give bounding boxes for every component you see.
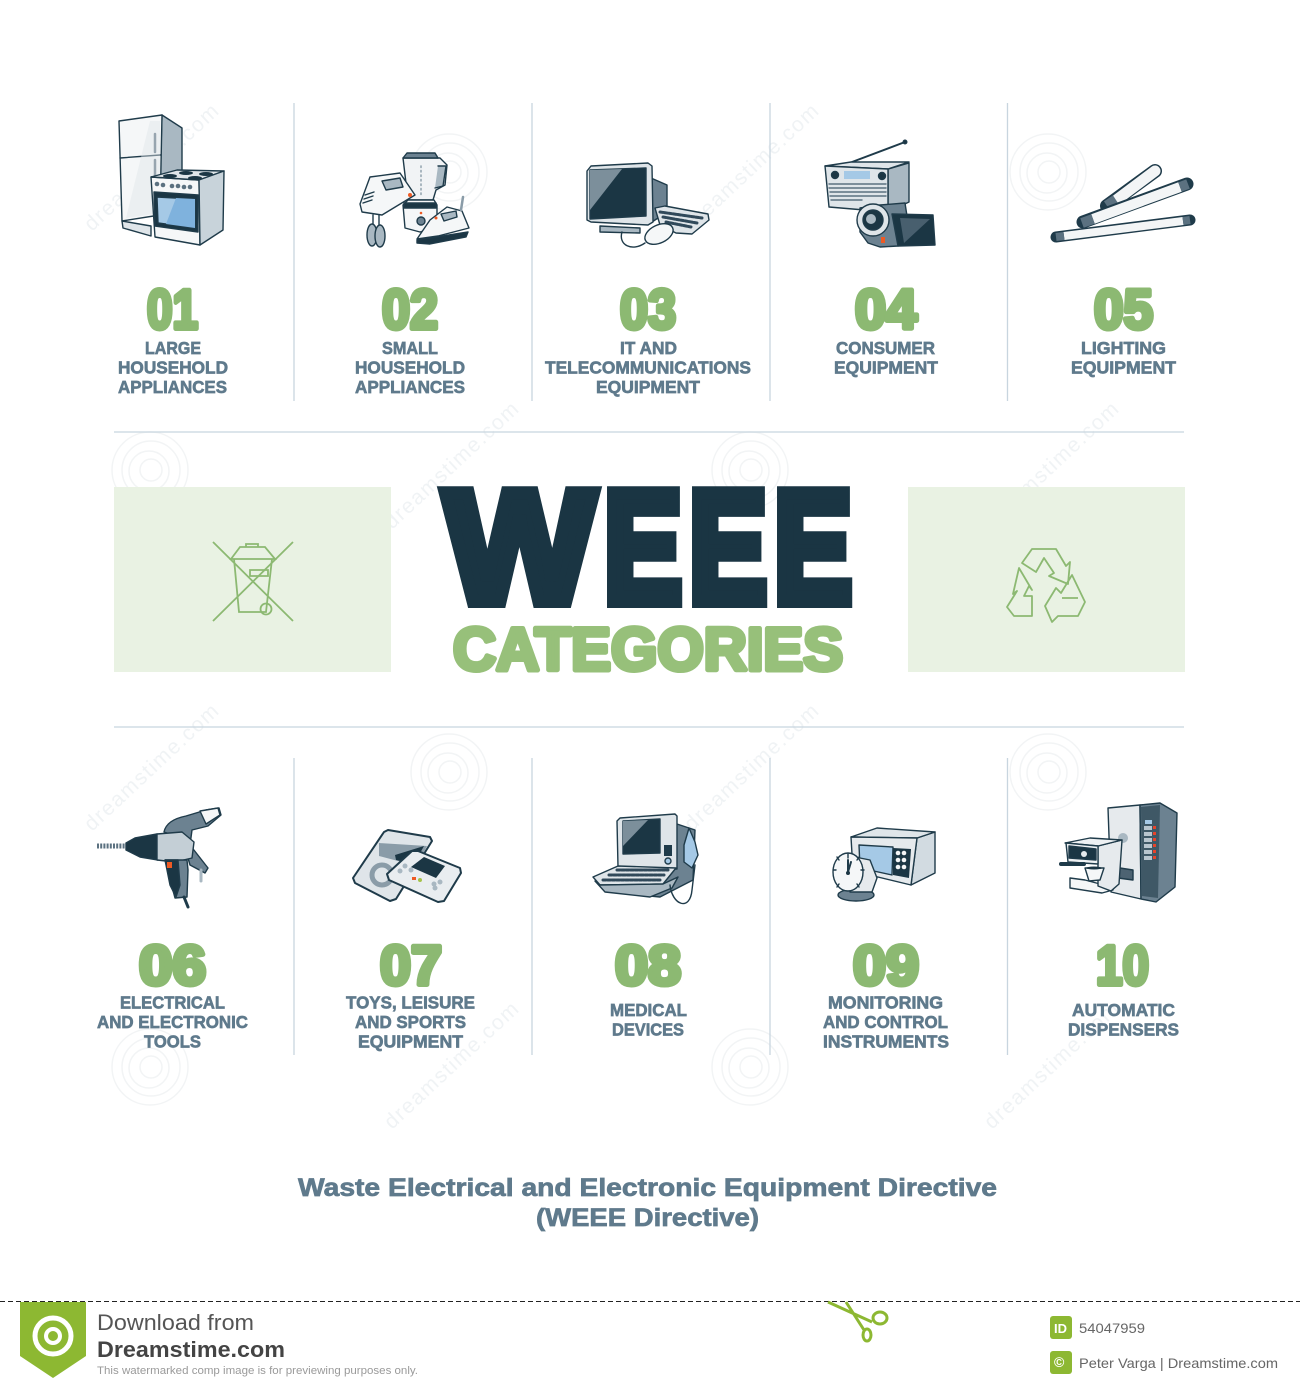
label 08: DEVICES <box>612 1020 684 1040</box>
number 04: 04 <box>855 278 917 340</box>
category 02: small household appliances <box>355 153 469 397</box>
label 07: AND SPORTS <box>355 1012 466 1032</box>
subtitle: CATEGORIES: CATEGORIES <box>453 616 843 683</box>
text: Dreamstime.com: Dreamstime.com <box>97 1337 285 1362</box>
number 07: 07 <box>380 934 442 996</box>
icon: recycling arrows <box>1007 549 1085 622</box>
category 01: large household appliances <box>118 115 228 397</box>
label 09: AND CONTROL <box>823 1012 948 1032</box>
text: dreamstime.com <box>380 997 524 1134</box>
label 02: SMALL <box>382 338 438 358</box>
title: WEEE: W <box>445 460 594 636</box>
category 09: monitoring and control instruments <box>823 828 949 1052</box>
panel: crossed-out bin <box>114 487 391 672</box>
category 08: medical devices <box>593 814 698 1040</box>
text: dreamstime.com <box>980 997 1124 1134</box>
number 03: 03 <box>620 278 676 340</box>
label 08: MEDICAL <box>610 1000 687 1020</box>
label 10: AUTOMATIC <box>1072 1000 1175 1020</box>
label 05: LIGHTING <box>1081 338 1166 358</box>
text: dreamstime.com <box>680 699 824 836</box>
number 01: 01 <box>147 278 198 340</box>
centre banner <box>114 460 1185 683</box>
number 08: 08 <box>615 934 681 996</box>
icon: radio and video camera <box>825 140 935 247</box>
label 04: EQUIPMENT <box>834 358 938 378</box>
label 06: TOOLS <box>144 1032 201 1052</box>
category 06: electrical and electronic tools <box>97 808 248 1052</box>
text: dreamstime.com <box>980 397 1124 534</box>
label 06: AND ELECTRONIC <box>97 1012 248 1032</box>
label 07: TOYS, LEISURE <box>346 992 475 1012</box>
label 03: TELECOMMUNICATIONS <box>545 358 751 378</box>
badge: copyright: © <box>1054 1354 1065 1370</box>
label 01 <box>118 338 228 397</box>
badge: image ID: ID <box>1054 1321 1067 1336</box>
label 02: HOUSEHOLD <box>355 358 465 378</box>
panel: recycling <box>908 487 1185 672</box>
bottom caption: Waste Electrical and Electronic Equipment Directive <box>298 1174 997 1202</box>
icon: fluorescent tubes <box>1056 171 1190 237</box>
category 03: IT and telecommunications equipment <box>545 163 751 397</box>
number 06: 06 <box>139 934 206 996</box>
text: dreamstime.com <box>680 99 824 236</box>
label 04 <box>834 338 938 378</box>
text: preview notice: This watermarked comp image is for previewing purposes only. <box>97 1365 418 1377</box>
icon: scissors <box>828 1302 887 1341</box>
label 09: MONITORING <box>828 992 943 1012</box>
text: dreamstime.com <box>380 397 524 534</box>
icon: crossed-out wheelie bin <box>213 542 293 621</box>
label 10: DISPENSERS <box>1068 1020 1179 1040</box>
label 07 <box>346 992 475 1052</box>
text: dreamstime.com <box>80 99 224 236</box>
category 10: automatic dispensers <box>1061 803 1179 1040</box>
label 06 <box>97 992 248 1052</box>
text: dreamstime.com <box>80 699 224 836</box>
label 06: ELECTRICAL <box>120 992 225 1012</box>
label 07: EQUIPMENT <box>358 1032 463 1052</box>
footer: download strip <box>0 1302 1300 1378</box>
label 05: EQUIPMENT <box>1071 358 1176 378</box>
label 09: INSTRUMENTS <box>823 1032 949 1052</box>
icon: drill and glue gun <box>97 808 221 907</box>
label 05 <box>1071 338 1176 378</box>
number 09: 09 <box>853 934 919 996</box>
number 02: 02 <box>382 278 438 340</box>
label 01: APPLIANCES <box>118 377 227 397</box>
icon: media player and handheld game <box>353 830 461 902</box>
category 07: toys, leisure and sports equipment <box>346 830 475 1052</box>
bottom caption <box>298 1174 997 1232</box>
icon: control box and gauge <box>833 828 935 901</box>
icon: mixer, blender and iron <box>360 153 469 247</box>
icon: fridge and stove <box>119 115 224 245</box>
label 04: CONSUMER <box>836 338 935 358</box>
title: WEEE: E <box>604 460 682 636</box>
label 01: HOUSEHOLD <box>118 358 228 378</box>
badge: copyright <box>1050 1351 1278 1374</box>
badge: image ID: 54047959 <box>1079 1320 1145 1336</box>
icon: vending and coffee machines <box>1061 803 1177 902</box>
number 10: 10 <box>1096 934 1149 996</box>
icon: medical monitor and keyboard <box>593 814 698 904</box>
label 03: IT AND <box>620 338 677 358</box>
label 03: EQUIPMENT <box>596 377 700 397</box>
label 10 <box>1068 1000 1179 1040</box>
label 08 <box>610 1000 687 1040</box>
text: download from: Download from <box>97 1310 254 1335</box>
badge: copyright: Peter Varga | Dreamstime.com <box>1079 1355 1278 1371</box>
icon: computer, keyboard and mouse <box>587 163 709 248</box>
label 01: LARGE <box>145 338 201 358</box>
title: WEEE: E <box>689 460 767 636</box>
bottom caption: (WEEE Directive) <box>536 1204 759 1232</box>
label 02: APPLIANCES <box>355 377 465 397</box>
badge: image ID <box>1050 1316 1145 1339</box>
icon: green ribbon with spiral <box>20 1302 86 1378</box>
label 03 <box>545 338 751 397</box>
label 02 <box>355 338 465 397</box>
label 09 <box>823 992 949 1052</box>
title: WEEE: E <box>774 460 852 636</box>
category 04: consumer equipment <box>825 140 938 378</box>
number 05: 05 <box>1094 278 1153 340</box>
category 05: lighting equipment <box>1056 171 1190 378</box>
